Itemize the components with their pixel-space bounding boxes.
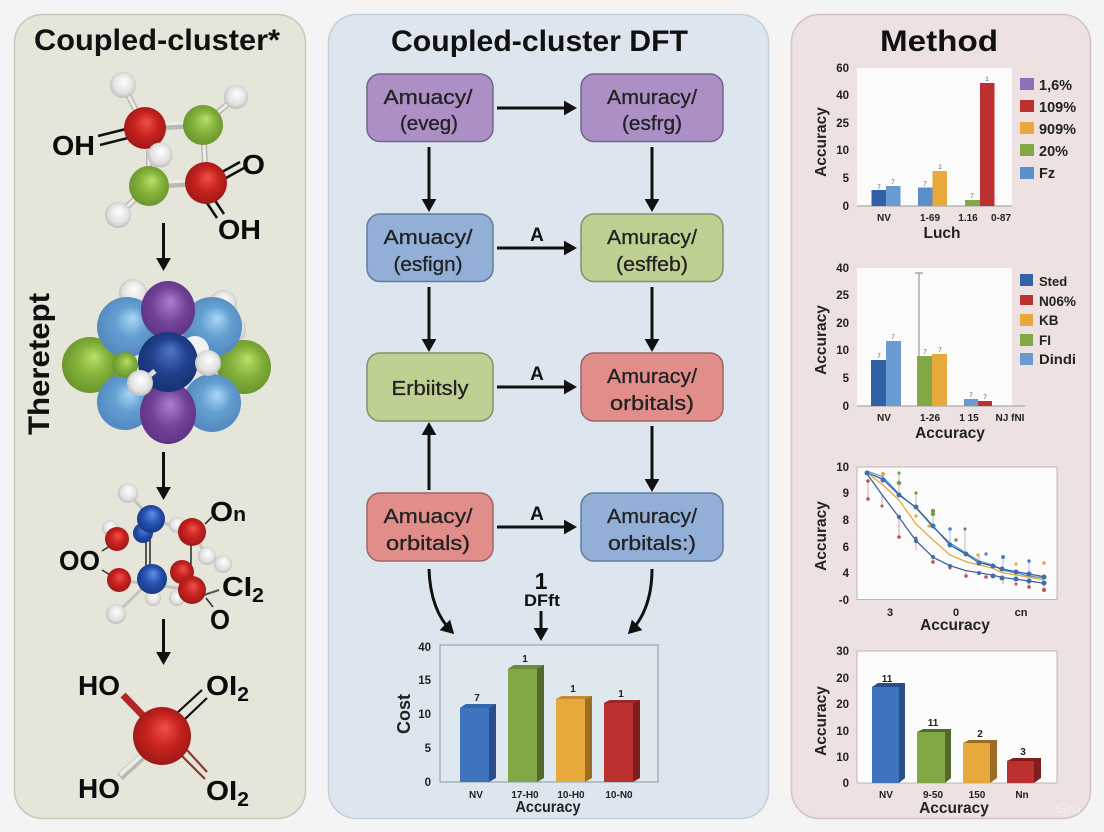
chart 2: grouped bars: Accuracy (915, 425, 985, 442)
chart 4: 3D bars (813, 646, 1057, 817)
chart 1: grouped bars: 25 (836, 118, 850, 130)
chart 1: grouped bars: 909% (1039, 122, 1076, 138)
chart 3: line chart: Accuracy (920, 617, 990, 634)
chart 4: 3D bars: 30 (836, 646, 849, 658)
flow box: purple right: (esfrg) (622, 113, 682, 135)
flow box: green right: (esffeb) (616, 254, 688, 276)
chart 4: 3D bars: 150 (969, 790, 986, 801)
flow box: purple left: (eveg) (400, 113, 458, 135)
chart 2: grouped bars (813, 263, 1076, 442)
bar chart: cost vs accuracy: 10-N0 (605, 790, 633, 801)
flow box: blue left: Amuacy/ (384, 227, 473, 249)
chart 3: line chart: 4 (843, 568, 850, 580)
flow box: blue left (367, 214, 493, 282)
molecule 4: 2 (237, 789, 249, 811)
chart 3: line chart: cn (1015, 607, 1028, 619)
chart 1: grouped bars: 2 (938, 165, 942, 171)
flow box: purple left: Amuacy/ (384, 87, 473, 109)
chart 2: grouped bars: Sted (1039, 274, 1067, 289)
chart 4: 3D bars: 11 (928, 718, 939, 729)
chart 1: grouped bars: 7 (923, 182, 927, 188)
flow box: blue left: (esfign) (394, 254, 462, 276)
arrows: flow connectors (429, 108, 652, 638)
chart 2: grouped bars: KB (1039, 313, 1059, 328)
chart 3: line chart: 8 (843, 515, 850, 527)
chart 3: line chart: 6 (843, 542, 849, 554)
chart 2: grouped bars: 7 (891, 335, 895, 341)
arrow: molecule 3 to 4 (162, 619, 165, 662)
chart 3: line chart (813, 462, 1057, 634)
label: DFT step: DFft (524, 591, 560, 610)
bar chart: cost vs accuracy: Cost (394, 694, 414, 734)
flow box: red right: Amuracy/ (607, 366, 697, 388)
bar chart: cost vs accuracy: Accuracy (516, 799, 581, 816)
flow box: red left: orbitals) (386, 533, 470, 555)
flow box: green right (581, 214, 723, 282)
chart 2: grouped bars: FI (1039, 333, 1051, 348)
label: DFT step: 1 (535, 568, 548, 594)
title: Method: Method (880, 25, 998, 58)
chart 2: grouped bars: Dindi (1039, 352, 1076, 367)
molecule 3: O (210, 604, 230, 635)
chart 1: grouped bars: 1.16 (958, 213, 978, 224)
molecule 1: OH (52, 130, 95, 161)
arrow labels: A (530, 225, 544, 246)
arrow labels: A (530, 504, 544, 525)
flow box: red left (367, 493, 493, 561)
chart 2: grouped bars: 1 15 (959, 413, 979, 424)
chart 1: grouped bars: 10 (836, 145, 849, 157)
chart 2: grouped bars: Accuracy (813, 305, 830, 375)
flow box: red left: Amuacy/ (384, 506, 473, 528)
chart 1: grouped bars: 1,6% (1039, 78, 1072, 94)
chart 4: 3D bars: 20 (836, 699, 849, 711)
bar chart: cost vs accuracy: 15 (418, 675, 432, 687)
chart 1: grouped bars: 20% (1039, 144, 1068, 160)
molecule 2: orbital cluster (62, 279, 271, 444)
flow box: red right: orbitals) (610, 393, 694, 415)
molecule 3 (59, 483, 264, 635)
chart 1: grouped bars: Fz (1039, 166, 1055, 182)
flow box: purple left (367, 74, 493, 142)
chart 1: grouped bars: Luch (923, 225, 961, 242)
chart 2: grouped bars: 20 (836, 318, 849, 330)
chart 2: grouped bars: 7 (969, 393, 973, 399)
chart 2: grouped bars: 0 (843, 401, 849, 413)
bar chart: cost vs accuracy: NV (469, 790, 483, 801)
molecule 1 (52, 72, 265, 245)
chart 4: 3D bars: 0 (843, 778, 849, 790)
flow box: purple right: Amuracy/ (607, 87, 697, 109)
bar chart: cost vs accuracy: 5 (425, 743, 432, 755)
chart 1: grouped bars: 7 (970, 194, 974, 200)
chart 3: line chart: Accuracy (813, 501, 830, 571)
chart 1: grouped bars: 5 (843, 173, 850, 185)
bar chart: cost vs accuracy: 1 (570, 684, 576, 695)
chart 2: grouped bars: 7 (983, 395, 987, 401)
molecule 4 (78, 670, 249, 811)
molecule 4: HO (78, 773, 120, 804)
chart 1: grouped bars: 7 (877, 185, 881, 191)
flow box: blue right: orbitals:) (608, 533, 696, 555)
chart 2: grouped bars: 7 (877, 354, 881, 360)
bar chart: cost vs accuracy: 0 (425, 777, 431, 789)
molecule 1: OH (218, 214, 261, 245)
watermark: Gro (1056, 800, 1081, 817)
chart 1: grouped bars: NV (877, 213, 891, 224)
chart 1: grouped bars: 1 (985, 77, 989, 83)
arrow labels: A (530, 364, 544, 385)
chart 3: line chart: -0 (839, 595, 849, 607)
chart 4: 3D bars: Accuracy (919, 800, 989, 817)
molecule 4: HO (78, 670, 120, 701)
chart 2: grouped bars: N06% (1039, 294, 1076, 309)
chart 2: grouped bars: 7 (923, 350, 927, 356)
chart 3: line chart: 0 (953, 607, 959, 619)
chart 1: grouped bars: 0-87 (991, 213, 1011, 224)
flow box: blue right (581, 493, 723, 561)
panel: method charts (792, 14, 1090, 818)
arrow: molecule 2 to 3 (162, 452, 165, 497)
chart 1: grouped bars: Accuracy (813, 107, 830, 177)
bar chart: cost vs accuracy: 10-H0 (557, 790, 585, 801)
chart 1: grouped bars (813, 63, 1076, 242)
flow box: red right (581, 353, 723, 421)
molecule 3: On (210, 496, 246, 527)
bar chart: cost vs accuracy: 40 (418, 642, 431, 654)
title: Coupled-cluster DFT: Coupled-cluster DFT (391, 25, 688, 58)
chart 4: 3D bars: Accuracy (813, 686, 830, 756)
molecule 4: OI (206, 775, 236, 806)
molecule 1: O (242, 149, 265, 180)
chart 2: grouped bars: 1-26 (920, 413, 940, 424)
chart 1: grouped bars: 40 (836, 90, 849, 102)
bar chart: cost vs accuracy (394, 642, 658, 816)
chart 4: 3D bars: 9-50 (923, 790, 943, 801)
flow box: blue right: Amuracy/ (607, 506, 697, 528)
chart 4: 3D bars: 3 (1020, 747, 1026, 758)
chart 4: 3D bars: 20 (836, 673, 849, 685)
chart 1: grouped bars: 0 (843, 201, 849, 213)
panel: coupled-cluster molecules (14, 14, 306, 818)
flow box: green right: Amuracy/ (607, 227, 697, 249)
chart 2: grouped bars: 25 (836, 290, 850, 302)
chart 4: 3D bars: Nn (1015, 790, 1029, 801)
bar chart: cost vs accuracy: 7 (474, 693, 480, 704)
chart 2: grouped bars: NJ fNI (996, 413, 1025, 424)
bar chart: cost vs accuracy: 17-H0 (511, 790, 539, 801)
molecule 4: 2 (237, 684, 249, 706)
chart 4: 3D bars: 11 (882, 674, 893, 685)
flow box: green left (367, 353, 493, 421)
chart 2: grouped bars: 10 (836, 345, 849, 357)
chart 4: 3D bars: 10 (836, 726, 849, 738)
molecule 3: CI (222, 571, 250, 602)
chart 2: grouped bars: NV (877, 413, 891, 424)
flow box: green left: Erbiitsly (392, 378, 468, 400)
chart 2: grouped bars: 5 (843, 373, 850, 385)
bar chart: cost vs accuracy: 1 (618, 689, 624, 700)
molecule 3: OO (59, 545, 100, 576)
chart 3: line chart: 10 (836, 462, 849, 474)
chart 1: grouped bars: 7 (891, 180, 895, 186)
chart 1: grouped bars: 60 (836, 63, 849, 75)
molecule 3: 2 (252, 585, 264, 607)
chart 1: grouped bars: 109% (1039, 100, 1076, 116)
flow box: purple right (581, 74, 723, 142)
chart 1: grouped bars: 1-69 (920, 213, 940, 224)
arrow: molecule 1 to 2 (162, 223, 165, 268)
chart 4: 3D bars: NV (879, 790, 893, 801)
chart 4: 3D bars: 2 (977, 729, 983, 740)
title: Coupled-cluster: Coupled-cluster* (34, 24, 280, 57)
chart 3: line chart: 9 (843, 488, 849, 500)
molecule 4: OI (206, 670, 236, 701)
bar chart: cost vs accuracy: 1 (522, 654, 528, 665)
chart 2: grouped bars: 40 (836, 263, 849, 275)
panel: coupled-cluster DFT flow (328, 14, 768, 818)
vertical label: Theretept (23, 293, 56, 435)
chart 4: 3D bars: 10 (836, 752, 849, 764)
arrow labels (530, 225, 544, 525)
label: DFT step (524, 568, 560, 610)
bar chart: cost vs accuracy: 10 (418, 709, 431, 721)
chart 2: grouped bars: 7 (938, 348, 942, 354)
chart 3: line chart: 3 (887, 607, 893, 619)
